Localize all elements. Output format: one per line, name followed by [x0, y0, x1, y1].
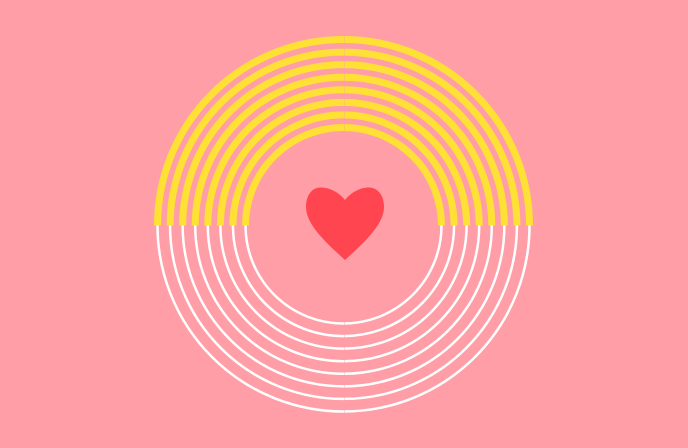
white concentric arcs: lower half [158, 226, 530, 412]
yellow concentric arcs: upper half [158, 40, 530, 226]
icon: red heart [306, 188, 384, 260]
